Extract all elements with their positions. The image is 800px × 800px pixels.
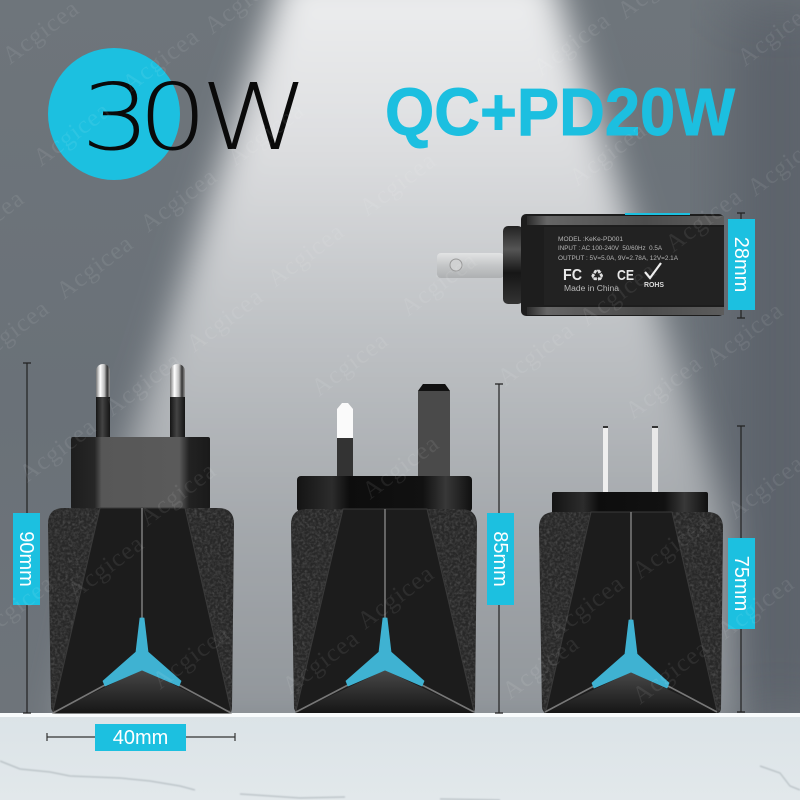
charger body: [291, 509, 477, 713]
charger: UK plug: [291, 384, 477, 713]
watermarks: Acgicea: [99, 347, 187, 422]
rating label text: ♻: [590, 268, 604, 285]
watermarks: Acgicea: [701, 297, 789, 372]
watermarks: Acgicea: [135, 163, 223, 238]
watermarks: Acgicea: [354, 147, 442, 222]
watermarks: Acgicea: [660, 183, 748, 258]
watermarks: Acgicea: [574, 257, 662, 332]
watermarks: Acgicea: [712, 570, 800, 645]
watermarks: Acgicea: [28, 97, 116, 172]
watermarks: Acgicea: [564, 117, 652, 192]
rating label text: OUTPUT : 5V=5.0A, 9V=2.78A, 12V=2.1A: [558, 255, 679, 262]
watermarks: Acgicea: [62, 530, 150, 605]
dimension: 90mm: [13, 363, 40, 713]
watermarks: Acgicea: [306, 327, 394, 402]
charger: US plug: [539, 426, 723, 713]
UK pins: [337, 384, 450, 476]
watermarks: Acgicea: [181, 283, 269, 358]
US pins: [603, 426, 658, 493]
watermarks: Acgicea: [14, 413, 102, 488]
rating label text: CE: [617, 267, 634, 284]
charger body: [539, 512, 723, 713]
rating label text: ROHS: [644, 282, 664, 289]
rating label text: INPUT : AC 100-240V 50/60Hz 0.5A: [558, 245, 663, 252]
rating label text: Made in China: [564, 284, 620, 293]
watermarks: Acgicea: [627, 635, 715, 710]
rating label text: [558, 236, 679, 293]
charger body: [48, 508, 234, 714]
watermarks: Acgicea: [222, 97, 310, 172]
dimension: 40mm: 40mm: [113, 727, 168, 749]
watermarks: Acgicea: [134, 457, 222, 532]
dimension: 40mm: [47, 724, 235, 751]
icon: blue Y logo: [592, 620, 669, 688]
watermarks: Acgicea: [277, 625, 365, 700]
dimension: 75mm: [728, 426, 755, 712]
watermarks: Acgicea: [352, 560, 440, 635]
watermarks: Acgicea: [117, 23, 205, 98]
rating label text: FC: [563, 267, 582, 284]
icon: blue Y logo: [346, 618, 424, 686]
floor: [0, 713, 800, 800]
watermarks: Acgicea: [542, 570, 630, 645]
badge: blue circle: [48, 48, 180, 180]
icon: side view prong: [437, 253, 504, 278]
dimension: 85mm: [487, 384, 514, 713]
heading: 30W: 30W: [81, 63, 309, 171]
icon: blue Y logo: [103, 618, 181, 686]
EU pins: [96, 364, 185, 438]
dimension: 75mm: 75mm: [730, 556, 752, 611]
watermarks: Acgicea: [620, 350, 708, 425]
watermarks: Acgicea: [147, 620, 235, 695]
watermarks: Acgicea: [395, 247, 483, 322]
watermarks: Acgicea: [492, 317, 580, 392]
heading: QC+PD20W: QC+PD20W: [385, 75, 736, 150]
watermarks: Acgicea: [51, 230, 139, 305]
watermarks: Acgicea: [627, 510, 715, 585]
watermarks: Acgicea: [528, 7, 616, 82]
watermarks: Acgicea: [357, 430, 445, 505]
watermarks: Acgicea: [497, 630, 585, 705]
dimension: 28mm: 28mm: [730, 237, 752, 292]
watermarks: Acgicea: [262, 218, 350, 293]
dimension: 90mm: 90mm: [15, 531, 37, 587]
side view charger with rating label: [437, 213, 724, 316]
charger: EU plug: [48, 364, 234, 714]
rating label text: MODEL :KeKe-PD001: [558, 236, 623, 243]
dimension: 28mm: [728, 213, 755, 318]
dimension: 85mm: 85mm: [489, 531, 511, 587]
